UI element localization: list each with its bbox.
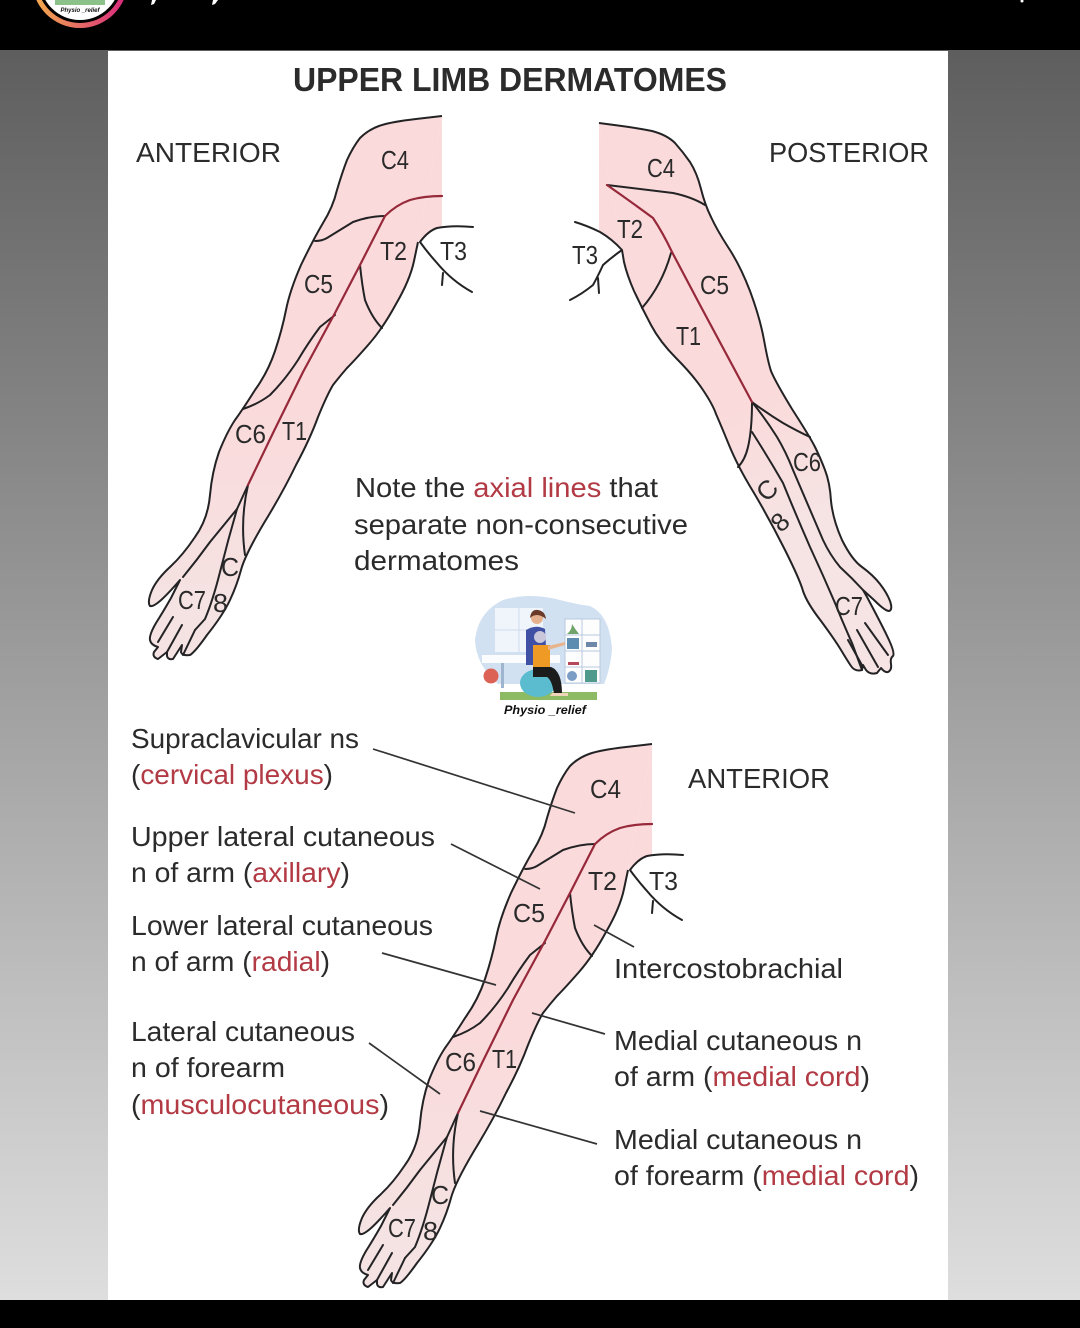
heading: posterior: POSTERIOR (769, 137, 929, 168)
icon: profile logo (32, 0, 128, 28)
label: supraclavicular (131, 723, 575, 813)
label: supraclavicular: Supraclavicular ns (131, 723, 359, 754)
logo name: Physio _relief (504, 703, 587, 717)
label: intercostobrachial (594, 925, 843, 984)
anterior arm diagram: C6 (235, 419, 266, 449)
label: lower lateral cutaneous: n of arm (radial) (131, 946, 330, 977)
anterior arm diagram: T1 (282, 416, 307, 446)
label: lower lateral cutaneous: Lower lateral cutaneous (131, 910, 433, 941)
posterior arm diagram: 8 (764, 506, 796, 538)
label: medial cutaneous of forearm: Medial cutaneous n (614, 1124, 862, 1155)
posterior arm diagram: T3 (572, 240, 598, 270)
anterior arm with nerve labels (359, 744, 683, 1287)
label: medial cutaneous of arm: Medial cutaneous n (614, 1025, 862, 1056)
note text: separate non-consecutive (354, 509, 688, 540)
posterior arm diagram: T1 (676, 321, 701, 351)
anterior arm with nerve labels: C7 (388, 1213, 416, 1243)
anterior arm diagram: T3 (440, 236, 467, 266)
posterior arm diagram: C4 (647, 153, 675, 183)
anterior arm diagram: C (221, 552, 239, 582)
label: lower lateral cutaneous (131, 910, 496, 985)
posterior arm diagram: C7 (835, 591, 863, 621)
white poster panel (108, 51, 948, 1300)
icon: profile logo: Physio _relief (60, 8, 101, 14)
anterior arm diagram: T2 (380, 236, 407, 266)
posterior arm diagram: C6 (793, 447, 821, 477)
posterior arm diagram: C5 (700, 270, 729, 300)
label: medial cutaneous of arm: of arm (medial cord) (614, 1061, 870, 1092)
title: UPPER LIMB DERMATOMES (293, 61, 727, 98)
therapist (531, 612, 543, 624)
note text: dermatomes (354, 545, 519, 576)
note text (354, 472, 688, 576)
anterior arm diagram: C5 (304, 269, 333, 299)
icon: Physio relief logo illustration (475, 596, 612, 717)
label: lateral cutaneous of forearm: Lateral cutaneous (131, 1016, 355, 1047)
anterior arm with nerve labels: 8 (423, 1216, 438, 1246)
label: medial cutaneous of forearm: of forearm (medial cord) (614, 1160, 919, 1191)
anterior arm with nerve labels: C6 (445, 1047, 476, 1077)
label: lateral cutaneous of forearm: n of forearm (131, 1052, 285, 1083)
anterior arm with nerve labels: T3 (649, 866, 678, 896)
top black bar (0, 0, 1080, 50)
heading: lower anterior: ANTERIOR (688, 763, 830, 794)
anterior arm with nerve labels: T1 (492, 1044, 517, 1074)
label: lateral cutaneous of forearm (131, 1016, 440, 1120)
label: upper lateral cutaneous (131, 821, 540, 889)
logo blob (475, 596, 612, 684)
label: supraclavicular: (cervical plexus) (131, 759, 333, 790)
heading: anterior: ANTERIOR (136, 137, 281, 168)
label: medial cutaneous of arm (532, 1013, 870, 1092)
note text: Note the axial lines that (355, 472, 658, 503)
anterior arm with nerve labels: C (431, 1180, 449, 1210)
anterior arm diagram (149, 116, 473, 659)
anterior arm diagram: 8 (213, 588, 228, 618)
bottom black bar (0, 1300, 1080, 1328)
patient (534, 631, 546, 643)
label: upper lateral cutaneous: n of arm (axillary) (131, 857, 350, 888)
label: intercostobrachial: Intercostobrachial (614, 953, 843, 984)
username text remnants (151, 0, 1024, 5)
anterior arm with nerve labels: C5 (513, 898, 545, 928)
posterior arm diagram (570, 123, 894, 674)
posterior arm diagram: T2 (617, 214, 643, 244)
label: upper lateral cutaneous: Upper lateral cutaneous (131, 821, 435, 852)
anterior arm with nerve labels: C4 (590, 774, 621, 804)
anterior arm diagram: C7 (178, 585, 206, 615)
label: lateral cutaneous of forearm: (musculocutaneous) (131, 1089, 389, 1120)
anterior arm with nerve labels: T2 (588, 866, 617, 896)
label: medial cutaneous of forearm (480, 1111, 919, 1191)
posterior arm diagram: C (750, 473, 784, 507)
anterior arm diagram: C4 (381, 145, 409, 175)
